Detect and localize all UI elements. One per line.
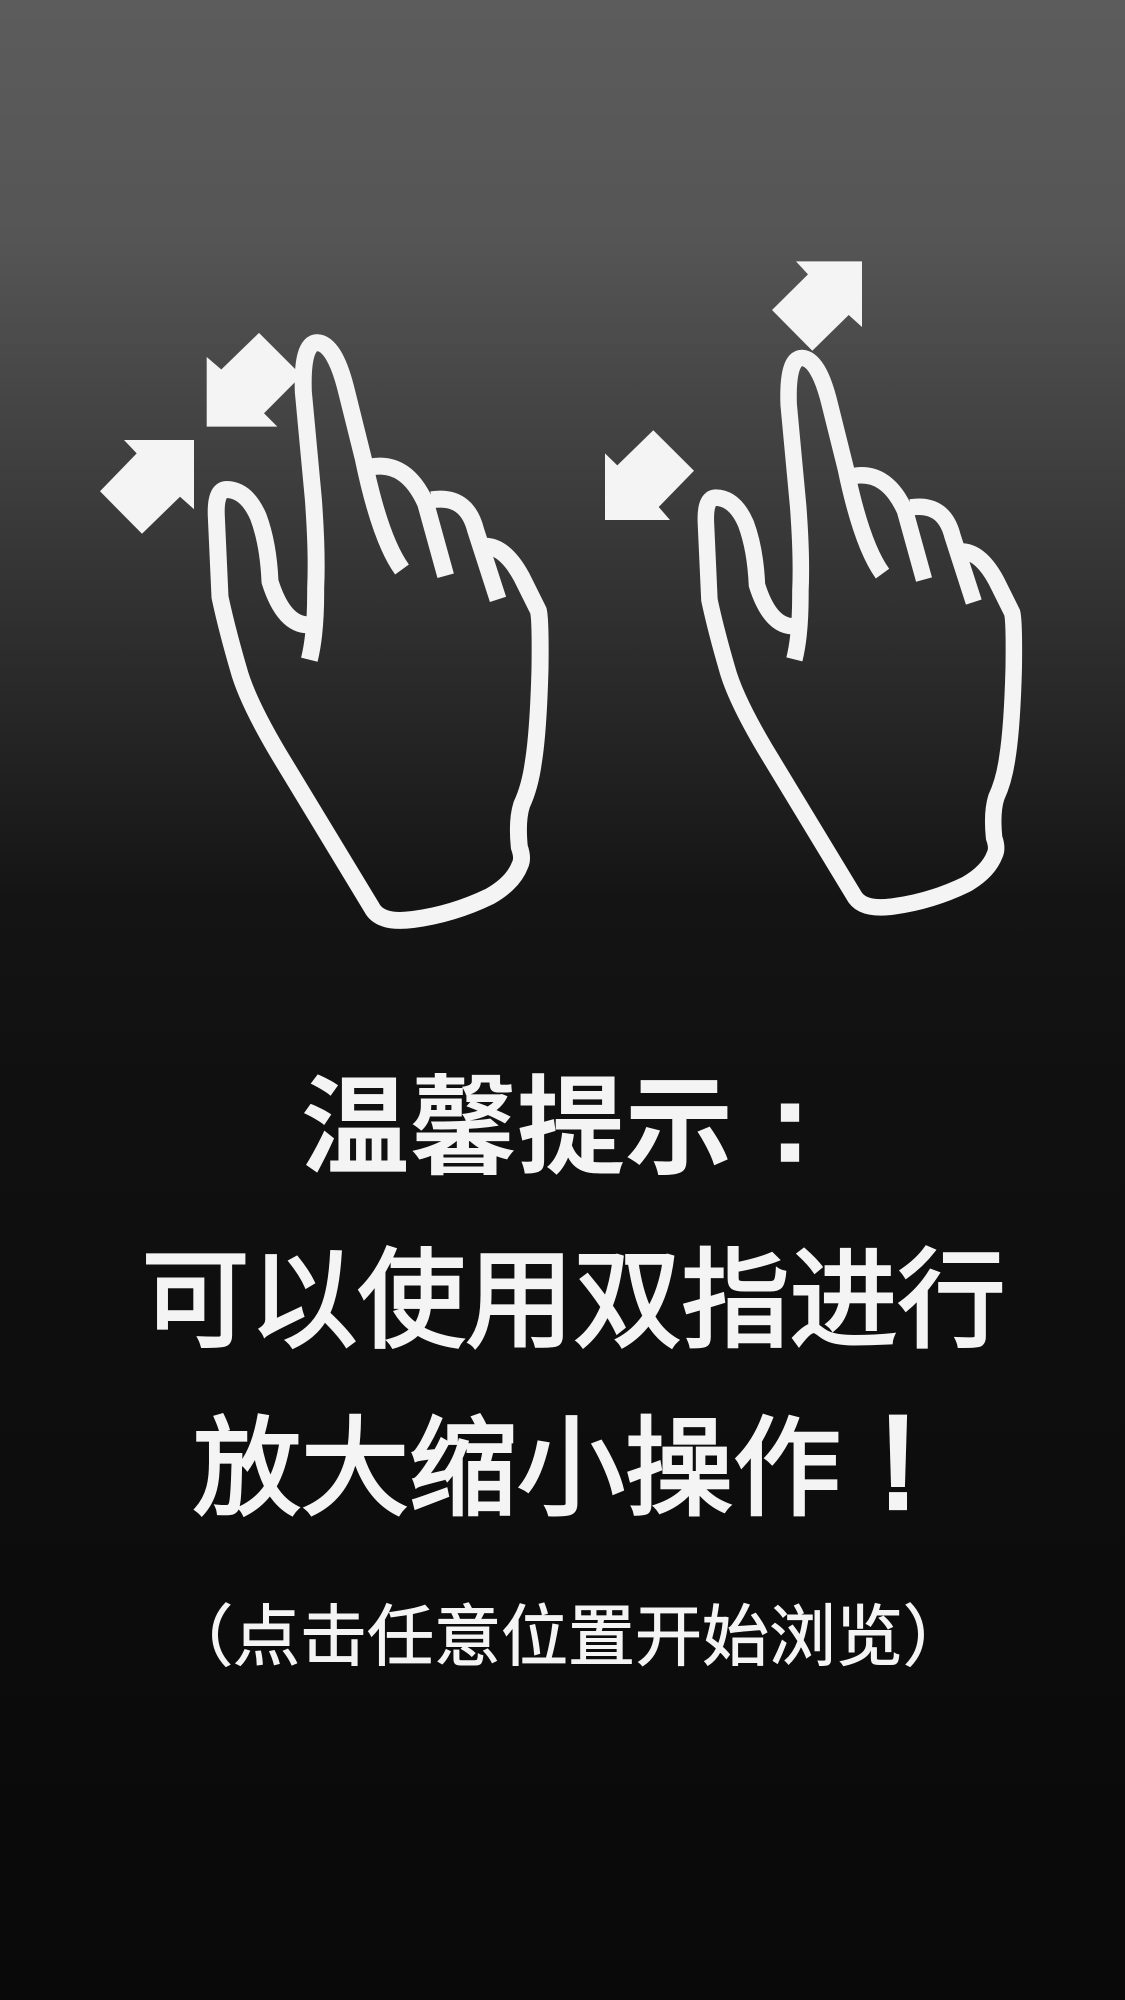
arrow: left arrow pointing outward <box>605 430 694 520</box>
icon: pinch-in gesture <box>100 333 540 920</box>
icon: hand outline, pinch-in <box>216 343 540 920</box>
arrow: lower arrow pointing inward <box>100 440 194 534</box>
heading: tip title: ： <box>734 1067 846 1179</box>
text: instruction line 2: ！ <box>842 1408 954 1520</box>
text: click anywhere hint: （点击任意位置开始浏览） <box>166 1600 970 1675</box>
icon: hand outline, pinch-out <box>706 358 1014 907</box>
heading: tip title: 温馨提示 <box>301 1067 733 1188</box>
text: instruction line 1: 可以使用双指进行 <box>141 1240 1006 1361</box>
text: instruction line 2: 放大缩小操作 <box>193 1408 841 1529</box>
arrow: upper arrow pointing outward <box>772 261 862 351</box>
icon: pinch-out gesture <box>605 261 1014 907</box>
arrow: upper arrow pointing inward <box>207 333 302 427</box>
